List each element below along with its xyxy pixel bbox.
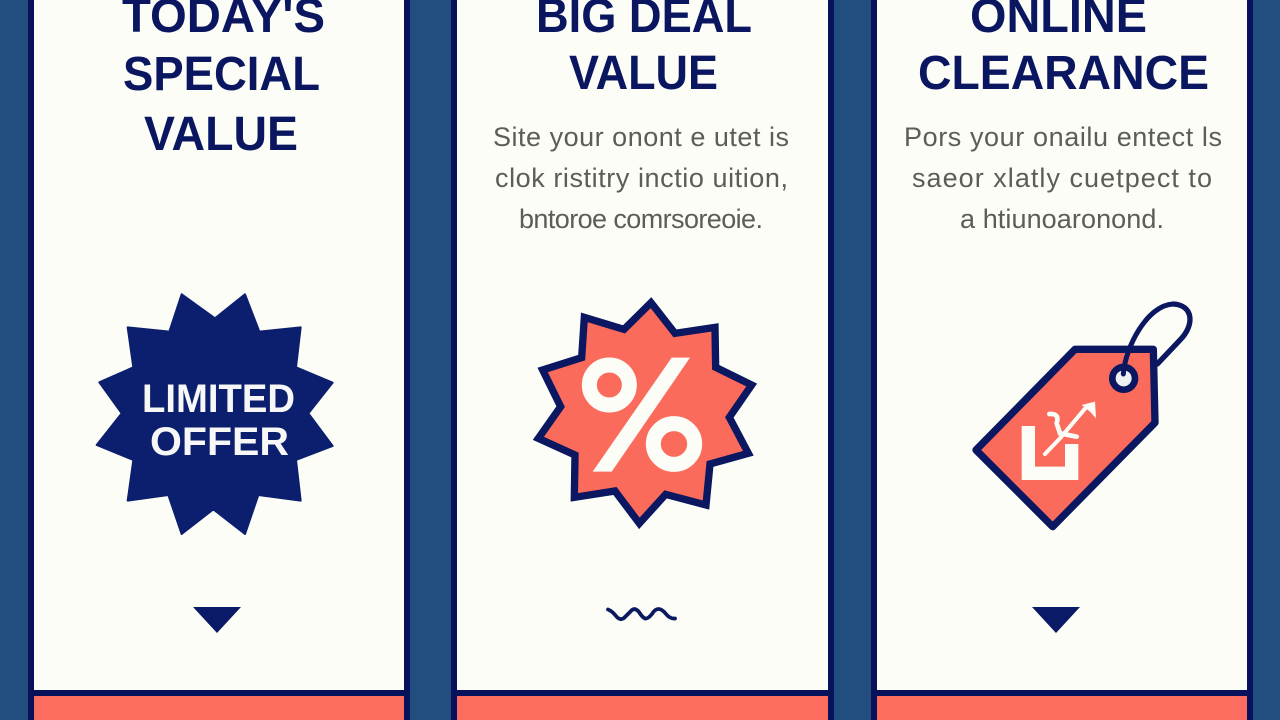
heading: online clearance xyxy=(918,0,1209,100)
panel frame xyxy=(28,0,410,720)
body text: Pors your onailu entect ls xyxy=(904,122,1222,152)
heading: today's special value: SPECIAL xyxy=(123,48,320,101)
body text xyxy=(904,122,1222,234)
body text: a htiunoaronond. xyxy=(960,204,1164,234)
body text: Site your onont e utet is xyxy=(493,122,789,152)
coral footer bar xyxy=(877,696,1247,720)
heading: online clearance: CLEARANCE xyxy=(918,47,1209,100)
heading: big deal value: VALUE xyxy=(569,47,718,100)
icon: limited offer starburst badge: OFFER xyxy=(150,420,289,464)
body text: clok ristitry inctio uition, xyxy=(495,163,788,193)
panel: today's special value xyxy=(28,0,410,720)
heading: today's special value: VALUE xyxy=(144,108,298,161)
coral footer bar xyxy=(34,696,404,720)
coral footer bar xyxy=(457,696,828,720)
icon: percent starburst badge xyxy=(538,303,752,523)
panel frame xyxy=(871,0,1253,720)
icon: limited offer starburst badge: LIMITED xyxy=(142,377,295,421)
body text xyxy=(493,122,789,234)
arrow: down triangle xyxy=(193,607,241,633)
panel: online clearance xyxy=(871,0,1253,720)
body text: bntoroe comrsoreoie. xyxy=(519,204,763,234)
panel background xyxy=(877,0,1247,690)
panel background xyxy=(34,0,404,690)
panel: big deal value xyxy=(451,0,834,720)
arrow: down triangle xyxy=(1032,607,1080,633)
icon: price tag xyxy=(976,304,1190,527)
icon: limited offer starburst badge xyxy=(97,294,333,534)
heading: today's special value xyxy=(122,0,325,161)
heading: big deal value xyxy=(536,0,752,100)
panel frame xyxy=(451,0,834,720)
body text: saeor xlatly cuetpect to xyxy=(912,163,1212,193)
icon: wavy divider xyxy=(608,609,675,619)
panel background xyxy=(457,0,828,690)
